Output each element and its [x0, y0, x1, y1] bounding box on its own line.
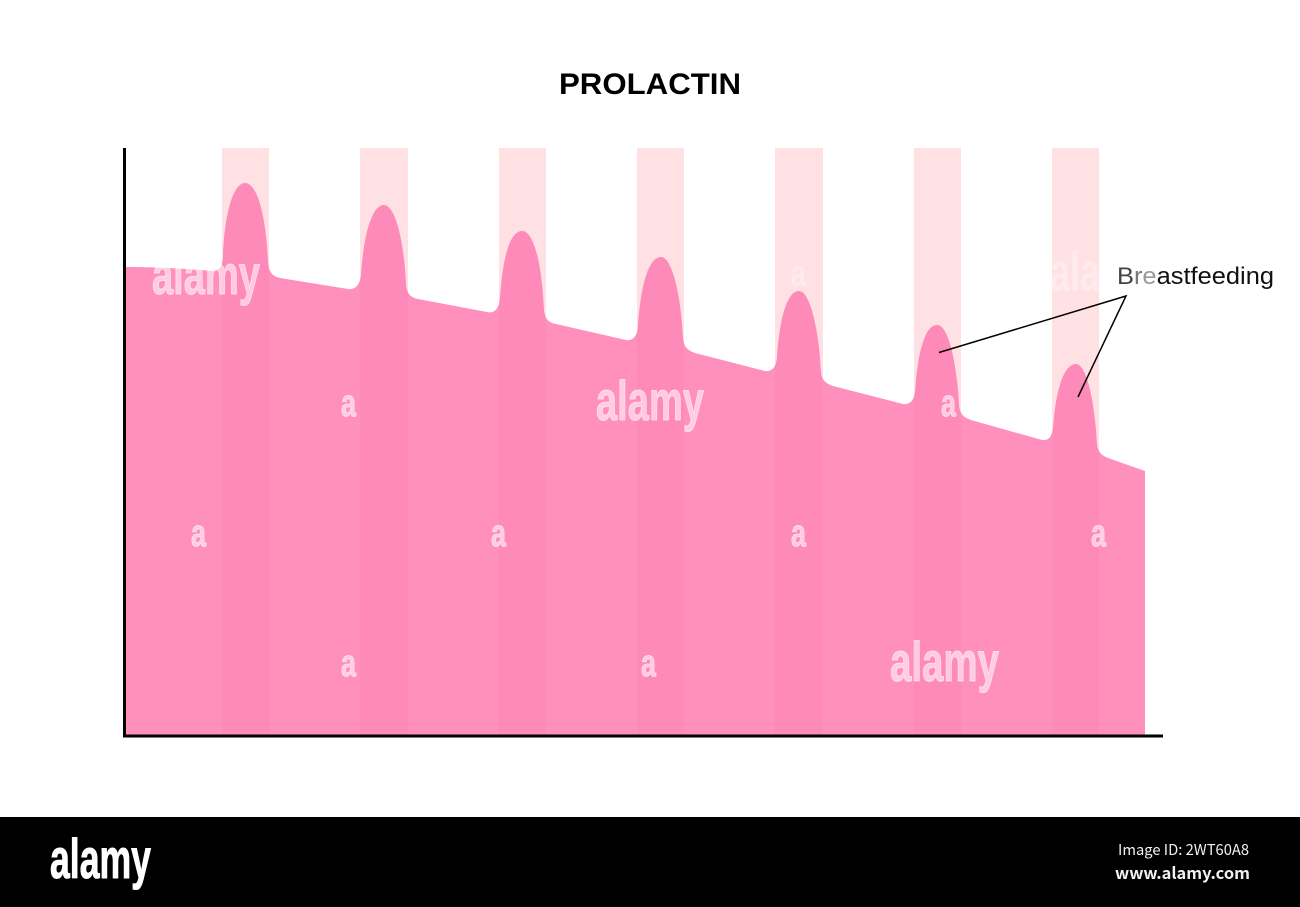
x axis [123, 734, 1163, 738]
watermarks: ala [1050, 240, 1101, 303]
watermarks: a [341, 643, 357, 685]
footer logo: alamy [50, 827, 151, 890]
watermarks: a [191, 513, 207, 555]
website: www.alamy.com [1115, 860, 1250, 884]
callout leader lines [939, 296, 1126, 397]
watermarks: a [791, 253, 807, 295]
watermarks: alamy [152, 243, 260, 306]
title: PROLACTIN [559, 68, 741, 101]
watermarks: a [341, 383, 357, 425]
chart: prolactin levels during breastfeeding [123, 148, 1163, 738]
watermarks: a [641, 643, 657, 685]
watermarks: a [491, 513, 507, 555]
breastfeeding period bands [222, 148, 1099, 735]
watermarks: a [1091, 513, 1107, 555]
prolactin area curve [125, 183, 1145, 735]
image id: Image ID: 2WT60A8 [1118, 839, 1249, 860]
watermarks: a [941, 383, 957, 425]
footer bar [0, 817, 1300, 907]
watermarks: a [791, 513, 807, 555]
darker band overlays on area [222, 183, 1099, 451]
y axis [123, 148, 126, 737]
watermarks [152, 240, 1107, 693]
watermarks: alamy [890, 630, 999, 693]
callout label: Breastfeeding [1117, 263, 1274, 290]
watermarks: alamy [596, 369, 704, 432]
